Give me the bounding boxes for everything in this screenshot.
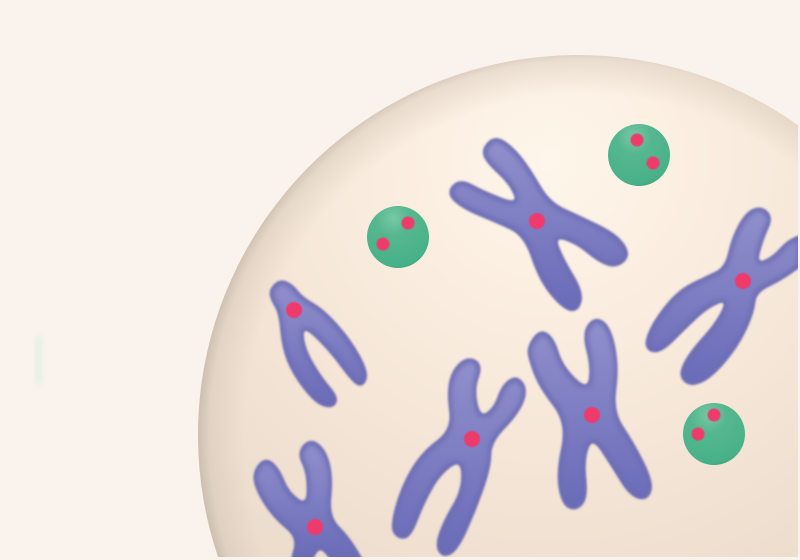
chromosome: top centre [451, 139, 627, 310]
cell rim shading [198, 55, 798, 557]
cell with chromosomes [198, 55, 800, 560]
centromere [584, 407, 600, 423]
chromosome: left Y-shaped [271, 282, 366, 406]
centromere [464, 431, 480, 447]
centromere [286, 302, 302, 318]
centromere [735, 273, 751, 289]
faint mint smudge [35, 335, 42, 385]
centromere [529, 213, 545, 229]
chromosome: lower middle [393, 359, 525, 555]
green organelle: top right [608, 124, 670, 186]
cell body [198, 55, 798, 557]
centromere [307, 519, 323, 535]
green organelle: upper left [367, 206, 429, 268]
green organelle: lower right [683, 403, 745, 465]
chromosome: lower centre right [529, 320, 651, 508]
chromosome: bottom left, cropped [255, 442, 362, 560]
chromosome: far right [647, 209, 800, 384]
